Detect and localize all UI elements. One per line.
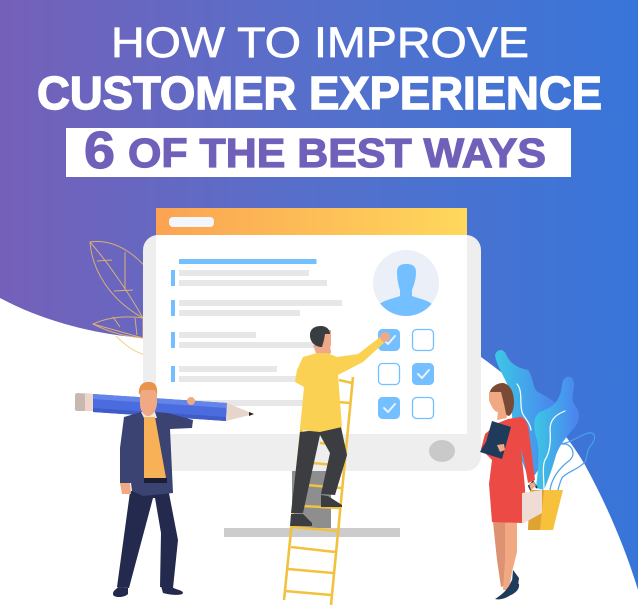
form text lines bbox=[171, 259, 342, 406]
person: man carrying pencil bbox=[75, 382, 254, 597]
person: man climbing ladder bbox=[290, 326, 390, 526]
subtitle banner: OF THE BEST WAYS bbox=[128, 130, 546, 176]
monitor base bbox=[224, 528, 400, 537]
checkbox grid bbox=[378, 330, 434, 418]
large pencil bbox=[75, 393, 254, 421]
window header bbox=[156, 208, 467, 235]
monitor screen bbox=[156, 235, 467, 434]
icon: profile avatar bbox=[373, 250, 439, 320]
ladder bbox=[284, 377, 353, 605]
subtitle banner bbox=[66, 122, 571, 180]
title: customer experience: CUSTOMER EXPERIENCE bbox=[37, 67, 602, 119]
decorative leaves bbox=[90, 242, 165, 354]
monitor button bbox=[429, 440, 455, 462]
title: how to improve: HOW TO IMPROVE bbox=[111, 19, 529, 67]
subtitle banner: 6 bbox=[84, 122, 115, 180]
monitor frame bbox=[143, 235, 481, 471]
monitor stand bbox=[292, 471, 331, 529]
person: woman with folder and bag bbox=[480, 383, 542, 599]
white wave background bbox=[0, 298, 638, 607]
potted plant bbox=[495, 350, 595, 530]
